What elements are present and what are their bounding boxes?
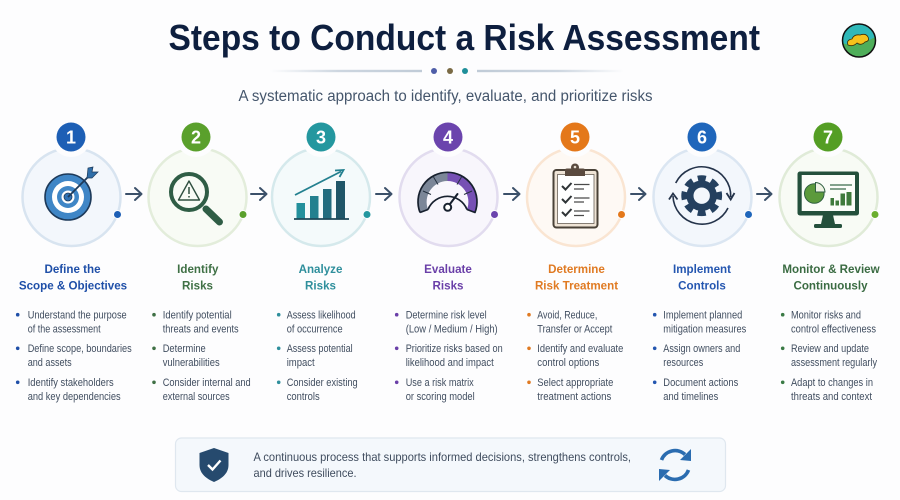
bullets 4: likelihood and impact	[406, 357, 494, 369]
step 5: determine risk treatment	[527, 117, 625, 403]
arrow 6 to 7	[757, 188, 772, 200]
ring 6	[654, 148, 752, 246]
bullets 7: Review and update	[791, 343, 869, 355]
bullets 1: and assets	[28, 357, 72, 369]
bullets 6: resources	[663, 357, 703, 369]
footer text: A continuous process that supports informed decisions, strengthens controls,	[254, 451, 631, 464]
title: Steps to Conduct a Risk Assessment	[168, 17, 760, 58]
bullets 5: Avoid, Reduce,	[537, 309, 597, 321]
bullets 3	[277, 309, 358, 403]
bullets 4	[395, 309, 503, 403]
heading 7: Continuously	[793, 280, 868, 292]
arrow 3 to 4	[376, 188, 392, 200]
bullets 5: treatment actions	[537, 391, 611, 403]
badge 2: 2	[191, 128, 201, 148]
arrow 4 to 5	[504, 188, 520, 200]
bullets 1: Define scope, boundaries	[28, 343, 132, 355]
arrow 1 to 2	[126, 188, 142, 200]
bullets 2: vulnerabilities	[163, 357, 220, 369]
badge 1	[51, 117, 91, 157]
bullets 4: Prioritize risks based on	[406, 343, 503, 355]
badge 3	[301, 117, 341, 157]
bullets 7: Monitor risks and	[791, 309, 861, 321]
bullets 6: Implement planned	[663, 309, 742, 321]
bullets 5: Select appropriate	[537, 377, 613, 389]
icon: gauge	[418, 172, 477, 212]
badge 5	[555, 117, 595, 157]
bullets 3: of occurrence	[287, 323, 343, 335]
badge 1: 1	[66, 128, 76, 148]
icon: gear with cycle arrows	[669, 167, 734, 224]
bullets 4: (Low / Medium / High)	[406, 323, 498, 335]
bullets 7: threats and context	[791, 391, 872, 403]
bullets 3: Assess potential	[287, 343, 353, 355]
step 1: define scope	[16, 117, 132, 403]
badge 3: 3	[316, 128, 326, 148]
badge 7	[808, 117, 848, 157]
icon: monitor dashboard	[798, 172, 859, 228]
footer panel	[176, 438, 726, 492]
icon: magnifier warning	[171, 174, 220, 222]
step 6: implement controls	[653, 117, 752, 403]
bullets 1: Identify stakeholders	[28, 377, 114, 389]
heading 6: Controls	[678, 280, 726, 292]
bullets 6: Assign owners and	[663, 343, 740, 355]
heading 6: Implement	[673, 263, 731, 276]
bullets 1: Understand the purpose	[28, 309, 127, 321]
ring 7	[780, 148, 878, 246]
bullets 5: Transfer or Accept	[537, 323, 612, 335]
bullets 5: Identify and evaluate	[537, 343, 623, 355]
bullets 3: Consider existing	[287, 377, 358, 389]
icon: target	[45, 167, 98, 220]
bullets 1	[16, 309, 132, 403]
bullets 6: mitigation measures	[663, 323, 746, 335]
step 4: evaluate risks	[395, 117, 503, 403]
ring 4	[400, 148, 498, 246]
subtitle: A systematic approach to identify, evaluate, and prioritize risks	[238, 88, 653, 105]
heading 7: Monitor & Review	[782, 263, 881, 276]
bullets 6: Document actions	[663, 377, 738, 389]
dot 7	[872, 211, 878, 218]
icon: shield check	[200, 448, 228, 482]
title divider	[270, 68, 624, 74]
heading 1: Define the	[44, 263, 101, 276]
ring 3	[272, 148, 370, 246]
bullets 7: Adapt to changes in	[791, 377, 873, 389]
bullets 4: or scoring model	[406, 391, 475, 403]
bullets 7	[781, 309, 878, 403]
icon: refresh arrows	[659, 449, 691, 481]
dot 6	[745, 211, 752, 218]
bullets 1: of the assessment	[28, 323, 101, 335]
badge 2	[176, 117, 216, 157]
step 2: identify risks	[148, 117, 251, 403]
heading 5: Determine	[548, 263, 605, 276]
badge 4	[428, 117, 468, 157]
ring 1	[22, 148, 120, 246]
bullets 3: Assess likelihood	[287, 309, 356, 321]
ring 5	[527, 148, 625, 246]
bullets 1: and key dependencies	[28, 391, 121, 403]
bullets 2: Consider internal and	[163, 377, 251, 389]
step 3: analyze risks	[272, 117, 370, 403]
heading 3: Risks	[305, 280, 336, 292]
bullets 3: impact	[287, 357, 315, 369]
bullets 2: Determine	[163, 343, 206, 355]
ring 2	[148, 148, 246, 246]
bullets 4: Determine risk level	[406, 309, 487, 321]
icon: logo badge	[842, 24, 876, 57]
bullets 5: control options	[537, 357, 599, 369]
footer text: and drives resilience.	[254, 467, 356, 480]
dot 2	[240, 211, 246, 218]
icon: clipboard checklist	[554, 164, 598, 228]
dot 5	[618, 211, 625, 218]
bullets 2: Identify potential	[163, 309, 232, 321]
arrow 2 to 3	[251, 188, 266, 200]
bullets 5	[527, 309, 623, 403]
bullets 2: threats and events	[163, 323, 239, 335]
heading 4: Evaluate	[424, 263, 472, 276]
bullets 2	[152, 309, 251, 403]
bullets 6: and timelines	[663, 391, 718, 403]
dot 4	[491, 211, 498, 218]
heading 2: Risks	[182, 280, 213, 292]
step 7: monitor and review	[780, 117, 881, 403]
dot 3	[364, 211, 370, 218]
arrow 5 to 6	[631, 188, 646, 200]
heading 2: Identify	[177, 263, 219, 276]
icon: growth bar chart	[294, 170, 349, 219]
heading 3: Analyze	[299, 263, 343, 276]
bullets 7: assessment regularly	[791, 357, 878, 369]
bullets 4: Use a risk matrix	[406, 377, 474, 389]
badge 7: 7	[823, 128, 833, 148]
footer text	[254, 451, 631, 480]
bullets 6	[653, 309, 746, 403]
bullets 3: controls	[287, 391, 320, 403]
badge 6: 6	[697, 128, 707, 148]
bullets 2: external sources	[163, 391, 230, 403]
badge 4: 4	[443, 128, 453, 148]
bullets 7: control effectiveness	[791, 323, 876, 335]
badge 6	[682, 117, 722, 157]
dot 1	[114, 211, 121, 218]
heading 1: Scope & Objectives	[19, 280, 127, 292]
heading 4: Risks	[433, 280, 463, 292]
badge 5: 5	[570, 128, 580, 148]
heading 5: Risk Treatment	[535, 280, 618, 292]
footer callout	[176, 438, 726, 492]
